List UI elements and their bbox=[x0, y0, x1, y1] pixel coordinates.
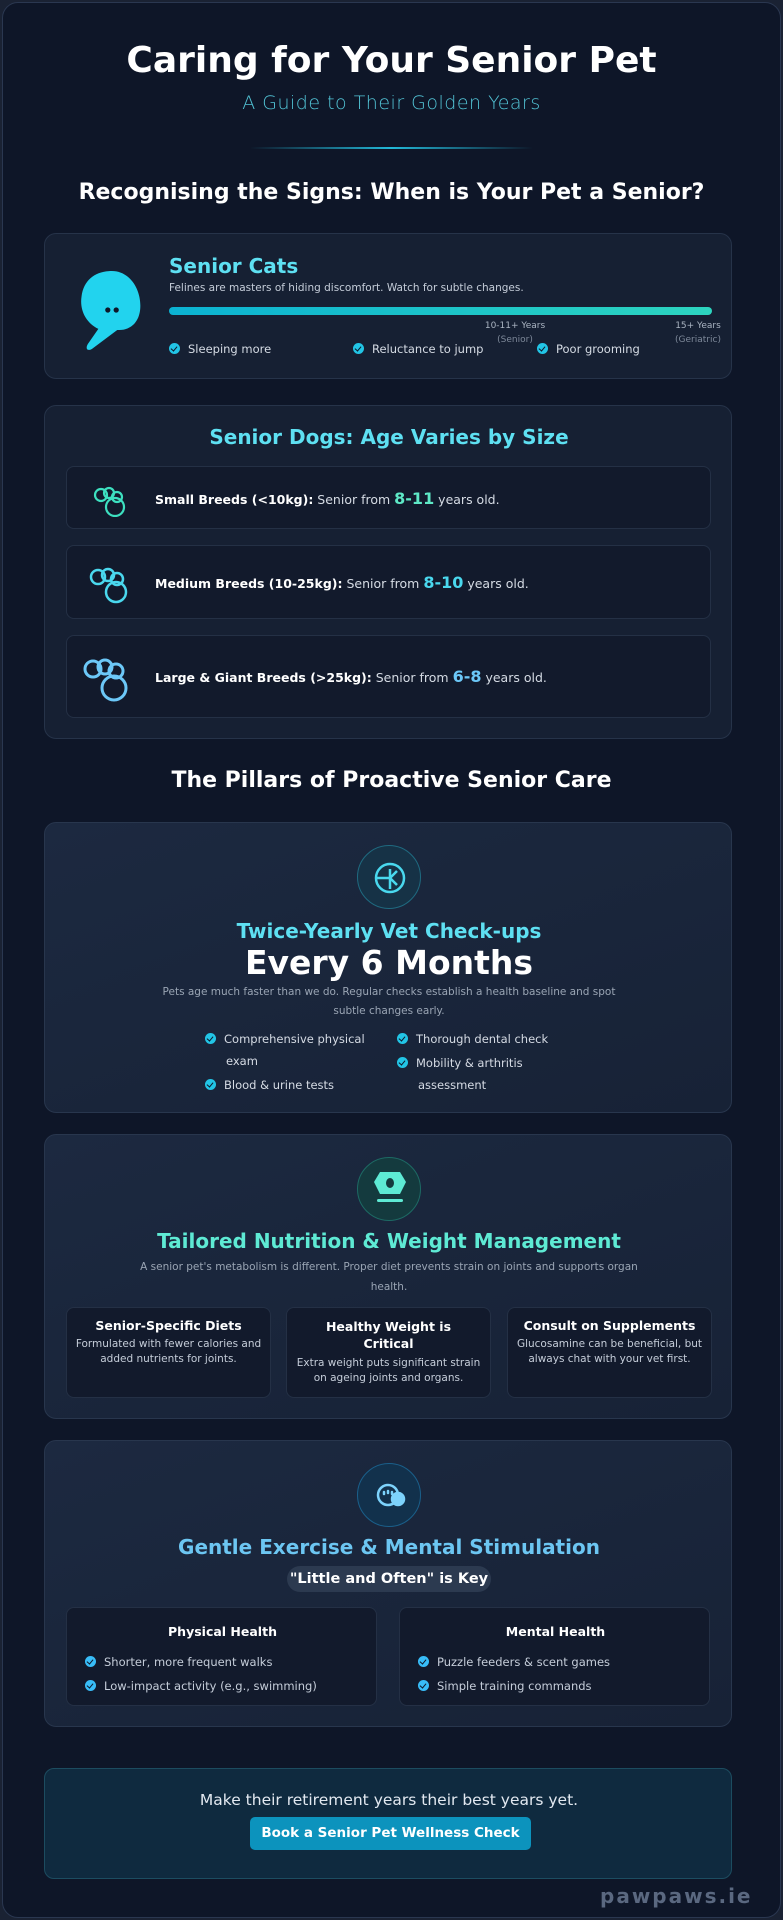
panel: senior cats: Poor grooming bbox=[556, 342, 640, 356]
panel: senior cats: (Geriatric) bbox=[675, 335, 721, 345]
box: senior diets: Formulated with fewer calories and added nutrients for joints. bbox=[76, 1338, 261, 1365]
icon: food bowl bbox=[357, 1157, 421, 1221]
cats title: Senior Cats bbox=[169, 254, 298, 278]
box: physical health bbox=[66, 1607, 377, 1706]
cta button bbox=[250, 1817, 531, 1850]
row: small breeds bbox=[66, 466, 711, 529]
row: large breeds bbox=[66, 635, 711, 718]
row: medium breeds: Medium Breeds (10-25kg): Senior from 8-10 years old. bbox=[155, 573, 529, 592]
panel: senior dogs bbox=[44, 405, 732, 739]
heading: signs: Recognising the Signs: When is Your Pet a Senior? bbox=[79, 180, 704, 205]
box: senior diets bbox=[66, 1307, 271, 1398]
panel: vet check-ups: Thorough dental check bbox=[416, 1032, 548, 1046]
panel: nutrition bbox=[44, 1134, 732, 1419]
nutrition description: A senior pet's metabolism is different. Proper diet prevents strain on joints and supports organ health. bbox=[140, 1261, 638, 1293]
box: senior diets: Senior-Specific Diets bbox=[95, 1318, 242, 1333]
panel: senior cats: Sleeping more bbox=[188, 342, 271, 356]
box: healthy weight: Extra weight puts significant strain on ageing joints and organs. bbox=[297, 1357, 480, 1384]
panel: vet check-ups bbox=[44, 822, 732, 1113]
box: healthy weight: Healthy Weight is bbox=[326, 1319, 451, 1334]
vet title: Twice-Yearly Vet Check-ups bbox=[237, 919, 541, 943]
icon: stethoscope bbox=[357, 845, 421, 909]
box: healthy weight: Critical bbox=[363, 1336, 414, 1351]
panel: senior cats: Reluctance to jump bbox=[372, 342, 483, 356]
title: Caring for Your Senior Pet bbox=[126, 40, 657, 81]
vet description: Pets age much faster than we do. Regular checks establish a health baseline and spot subtle changes early. bbox=[163, 986, 615, 1017]
row: large breeds: Large & Giant Breeds (>25kg): Senior from 6-8 years old. bbox=[155, 667, 547, 686]
box: mental health: Mental Health bbox=[506, 1624, 605, 1639]
exercise title: Gentle Exercise & Mental Stimulation bbox=[178, 1535, 600, 1559]
box: supplements: Glucosamine can be beneficial, but always chat with your vet first. bbox=[517, 1338, 702, 1365]
box: mental health bbox=[399, 1607, 710, 1706]
pill: little and often bbox=[287, 1566, 491, 1592]
timeline labels bbox=[485, 321, 545, 345]
cta text: Make their retirement years their best years yet. bbox=[200, 1791, 578, 1809]
box: physical health: Shorter, more frequent walks bbox=[104, 1655, 272, 1669]
cat signs list bbox=[169, 342, 640, 356]
box: supplements: Consult on Supplements bbox=[524, 1318, 695, 1333]
box: supplements bbox=[507, 1307, 712, 1398]
panel: senior cats: 15+ Years bbox=[675, 321, 721, 331]
icon: paw ball bbox=[357, 1463, 421, 1527]
box: mental health: Puzzle feeders & scent games bbox=[437, 1655, 610, 1669]
timeline labels: (Senior) bbox=[497, 335, 533, 345]
panel: vet check-ups: Blood & urine tests bbox=[224, 1078, 334, 1092]
panel: exercise bbox=[44, 1440, 732, 1727]
cats description: Felines are masters of hiding discomfort. Watch for subtle changes. bbox=[169, 282, 524, 294]
icon: cat speech bubble bbox=[81, 271, 140, 350]
row: medium breeds bbox=[66, 545, 711, 619]
pill: little and often: "Little and Often" is Key bbox=[290, 1571, 488, 1587]
footer brand: pawpaws.ie bbox=[600, 1884, 752, 1908]
panel: vet check-ups: Mobility & arthritis assessment bbox=[416, 1056, 523, 1092]
heading: pillars: The Pillars of Proactive Senior Care bbox=[171, 768, 612, 793]
box: healthy weight bbox=[286, 1307, 491, 1398]
panel: senior cats bbox=[44, 233, 732, 379]
box: mental health: Simple training commands bbox=[437, 1679, 592, 1693]
timeline bar bbox=[169, 307, 712, 315]
box: physical health: Low-impact activity (e.g., swimming) bbox=[104, 1679, 317, 1693]
cta button: Book a Senior Pet Wellness Check bbox=[261, 1825, 520, 1841]
vet checklist bbox=[205, 1032, 548, 1092]
dogs title: Senior Dogs: Age Varies by Size bbox=[209, 425, 569, 449]
nutrition title: Tailored Nutrition & Weight Management bbox=[157, 1229, 621, 1253]
panel: vet check-ups: Comprehensive physical exam bbox=[224, 1032, 365, 1068]
row: small breeds: Small Breeds (<10kg): Senior from 8-11 years old. bbox=[155, 489, 500, 508]
callout: call to action bbox=[44, 1768, 732, 1879]
stat: every 6 months: Every 6 Months bbox=[245, 943, 533, 982]
timeline labels: 10-11+ Years bbox=[485, 321, 545, 331]
subtitle: A Guide to Their Golden Years bbox=[242, 92, 541, 114]
box: physical health: Physical Health bbox=[168, 1624, 277, 1639]
